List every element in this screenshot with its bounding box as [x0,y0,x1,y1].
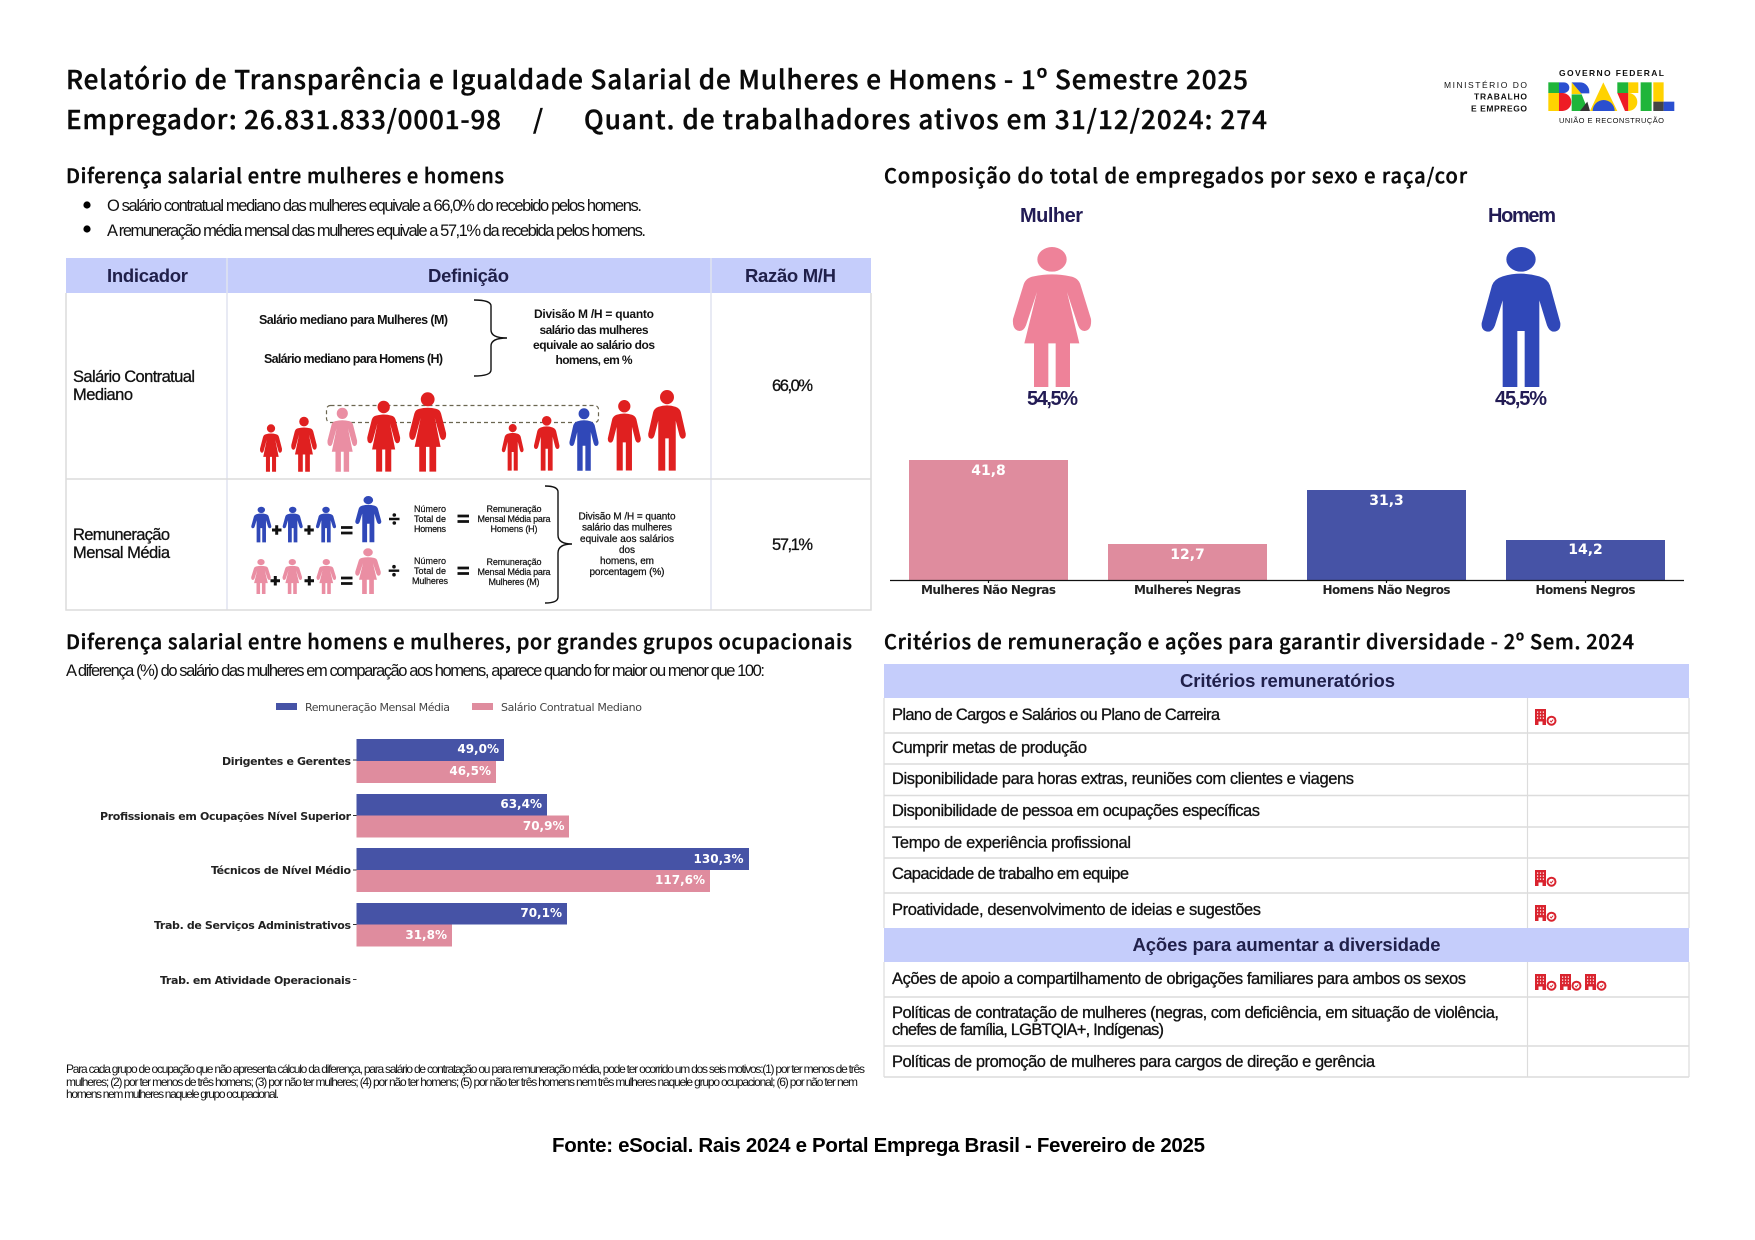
page title: Empregador: 26.831.833/0001-98 [66,100,501,137]
bar chart: occupational groups: 70,1% [520,906,562,920]
bar chart: occupational groups: Profissionais em Ocupações Nível Superior [100,810,352,823]
mean formula text: Mulheres (M) [488,577,540,587]
mean formula text: Mensal Média para [478,514,550,524]
bar chart: occupational groups: 130,3% [694,852,744,866]
table headers: Definição [428,265,509,286]
bar chart: composition by sex and race: 14,2 [1568,542,1603,558]
action rows [892,970,1499,1071]
criteria rows: Disponibilidade para horas extras, reuniões com clientes e viagens [892,770,1354,788]
bar chart: composition by sex and race: 41,8 [971,463,1006,479]
mean formula text: Mensal Média para [478,567,550,577]
legend [276,701,642,714]
table headers [107,265,836,286]
bar chart: occupational groups: 63,4% [500,797,542,811]
criteria rows: Plano de Cargos e Salários ou Plano de Carreira [892,706,1221,724]
table headers: Razão M/H [745,265,836,286]
median definition text: equivale ao salário dos [533,338,655,352]
legend: Salário Contratual Mediano [501,701,642,714]
subtitle: A diferença (%) do salário das mulheres em comparação aos homens, aparece quando for maior ou menor que 100: [66,662,765,680]
mean formula text: homens, em [600,556,654,567]
median definition text: Divisão M /H = quanto [534,307,654,321]
mean formula text: Mulheres [412,576,448,586]
panel: Mulher figure: Mulher [1020,205,1083,227]
bar chart: composition by sex and race: Mulheres Negras [1134,583,1241,597]
bar chart: composition by sex and race: 12,7 [1170,547,1205,563]
panel: indicator table [66,258,871,610]
action rows: Políticas de promoção de mulheres para cargos de direção e gerência [892,1053,1376,1071]
criteria rows: Proatividade, desenvolvimento de ideias e sugestões [892,901,1261,919]
icon: building check [1535,870,1556,887]
footnote: Para cada grupo de ocupação que não apresenta cálculo da diferença, para salário de contratação ou para remuneração média, pode ter ocorrido um dos seis motivos:(1) por ter menos de três [66,1062,865,1076]
criteria rows: Capacidade de trabalho em equipe [892,865,1129,883]
bar chart: occupational groups: Dirigentes e Gerentes [222,755,351,768]
bar chart: composition by sex and race: Homens Negros [1536,583,1636,597]
median figures [260,390,686,472]
logo: Ministério do Trabalho e Emprego / Governo Federal Brasil: TRABALHO [1474,92,1527,102]
row label: Remuneração Mensal Média: Remuneração [73,526,170,544]
logo: Ministério do Trabalho e Emprego / Governo Federal Brasil: UNIÃO E RECONSTRUÇÃO [1559,116,1664,125]
source line: Fonte: eSocial. Rais 2024 e Portal Emprega Brasil - Fevereiro de 2025 [552,1134,1205,1157]
mean formula text: Homens (H) [490,524,538,534]
median definition text [259,300,655,376]
mean formula text: Total de [414,566,446,576]
footnote: homens nem mulheres naquele grupo ocupacional. [66,1087,279,1101]
bar chart: occupational groups: 46,5% [449,764,491,778]
header: Ações para aumentar a diversidade: Ações para aumentar a diversidade [1132,934,1440,955]
mean formula text [412,486,676,603]
bullet list: O salário contratual mediano das mulheres equivale a 66,0% do recebido pelos homens. [107,197,642,215]
mean formula text: Remuneração [486,557,542,567]
mean formula text: Homens [414,524,446,534]
mean formula text: salário das mulheres [582,522,672,534]
bar chart: composition by sex and race: Homens Não Negros [1322,583,1450,597]
panel: Mulher figure [1013,205,1091,410]
action rows: chefes de família, LGBTQIA+, Indígenas) [892,1021,1164,1039]
legend: Remuneração Mensal Média [305,701,450,714]
row label: Salário Contratual Mediano [73,368,195,404]
heading: Critérios de remuneração: Critérios de remuneração e ações para garantir diversidade - 2º Sem. 2024 [884,626,1634,655]
bar chart: occupational groups: 70,9% [523,819,564,833]
footnote: mulheres; (2) por ter menos de três homens; (3) por não ter mulheres; (4) por não ter homens; (5) por não ter três homens nem três mulheres naquele grupo ocupacional; (6) por não ter nem [66,1075,858,1089]
mean formula text: Número [414,504,446,514]
criteria rows: Tempo de experiência profissional [892,834,1131,852]
icon: building check [1535,905,1556,922]
criteria rows: Cumprir metas de produção [892,739,1087,757]
median definition text: salário das mulheres [540,323,649,337]
panel: criteria table [884,664,1689,1077]
bar chart: occupational groups: Técnicos de Nível Médio [211,864,351,877]
mean formula text: porcentagem (%) [590,567,664,578]
row label: Salário Contratual Mediano: Salário Contratual [73,368,195,386]
footnote [66,1062,865,1101]
mean formula text: dos [619,545,635,556]
bar chart: composition by sex and race [890,460,1684,597]
panel: Homem figure: Homem [1488,205,1556,227]
logo: Ministério do Trabalho e Emprego / Governo Federal Brasil: MINISTÉRIO DO [1444,80,1527,90]
mean formula text: Número [414,556,446,566]
page title [66,60,1267,137]
heading: Diferença salarial entre mulheres e homens: Diferença salarial entre mulheres e homens [66,160,504,189]
median definition text: homens, em % [556,353,633,367]
page title: Quant. de trabalhadores ativos em 31/12/2024: 274 [584,100,1267,137]
bullet list: A remuneração média mensal das mulheres equivale a 57,1% da recebida pelos homens. [107,222,646,240]
value: 57,1%: 57,1% [772,536,813,554]
median definition text: Salário mediano para Homens (H) [264,352,443,366]
mean formula text: Remuneração [486,504,542,514]
bar chart: occupational groups [100,739,749,987]
panel: Mulher figure: 54,5% [1027,388,1078,410]
bar chart: occupational groups: 117,6% [655,873,705,887]
bar chart: occupational groups: Trab. em Atividade Operacionais [160,974,351,987]
bar chart: occupational groups: 49,0% [457,742,499,756]
bar chart: occupational groups: Trab. de Serviços Administrativos [154,919,351,932]
header: Critérios remuneratórios: Critérios remuneratórios [1180,670,1395,691]
action rows: Políticas de contratação de mulheres (negras, com deficiência, em situação de violência, [892,1004,1499,1022]
icons: three buildings [1535,974,1606,991]
icon: building check [1535,709,1556,726]
row label: Remuneração Mensal Média: Mensal Média [73,544,171,562]
bar chart: occupational groups: 31,8% [405,928,447,942]
logo: Ministério do Trabalho e Emprego / Governo Federal Brasil [1444,68,1674,125]
mean formula text: equivale aos salários [580,534,674,545]
logo: Ministério do Trabalho e Emprego / Governo Federal Brasil: GOVERNO FEDERAL [1559,68,1664,78]
bar chart: composition by sex and race: 31,3 [1369,493,1404,509]
mean formula text: Divisão M /H = quanto [578,512,676,522]
criteria rows: Disponibilidade de pessoa em ocupações específicas [892,802,1260,820]
bar chart: composition by sex and race: Mulheres Não Negras [921,583,1056,597]
bullet list [83,197,646,240]
mean formula figures [251,496,469,594]
panel: Homem figure: 45,5% [1495,388,1547,410]
row label: Remuneração Mensal Média [73,526,171,562]
row label: Salário Contratual Mediano: Mediano [73,386,133,404]
heading: Diferença por grandes grupos ocupacionais: Diferença salarial entre homens e mulheres, por grandes grupos ocupacionais [66,626,852,655]
heading: Composição do total de empregados: Composição do total de empregados por sexo e raça/cor [884,160,1468,189]
panel: Homem figure [1482,205,1560,410]
mean formula text: Total de [414,514,446,524]
action rows: Ações de apoio a compartilhamento de obrigações familiares para ambos os sexos [892,970,1466,988]
logo: Ministério do Trabalho e Emprego / Governo Federal Brasil: E EMPREGO [1471,104,1527,114]
page title: Relatório de Transparência e Igualdade Salarial de Mulheres e Homens - 1º Semestre 2025 [66,60,1248,97]
criteria rows [892,706,1354,919]
median definition text: Salário mediano para Mulheres (M) [259,313,448,327]
table headers: Indicador [107,265,188,286]
value: 66,0%: 66,0% [772,377,813,395]
page title: / [533,100,543,137]
